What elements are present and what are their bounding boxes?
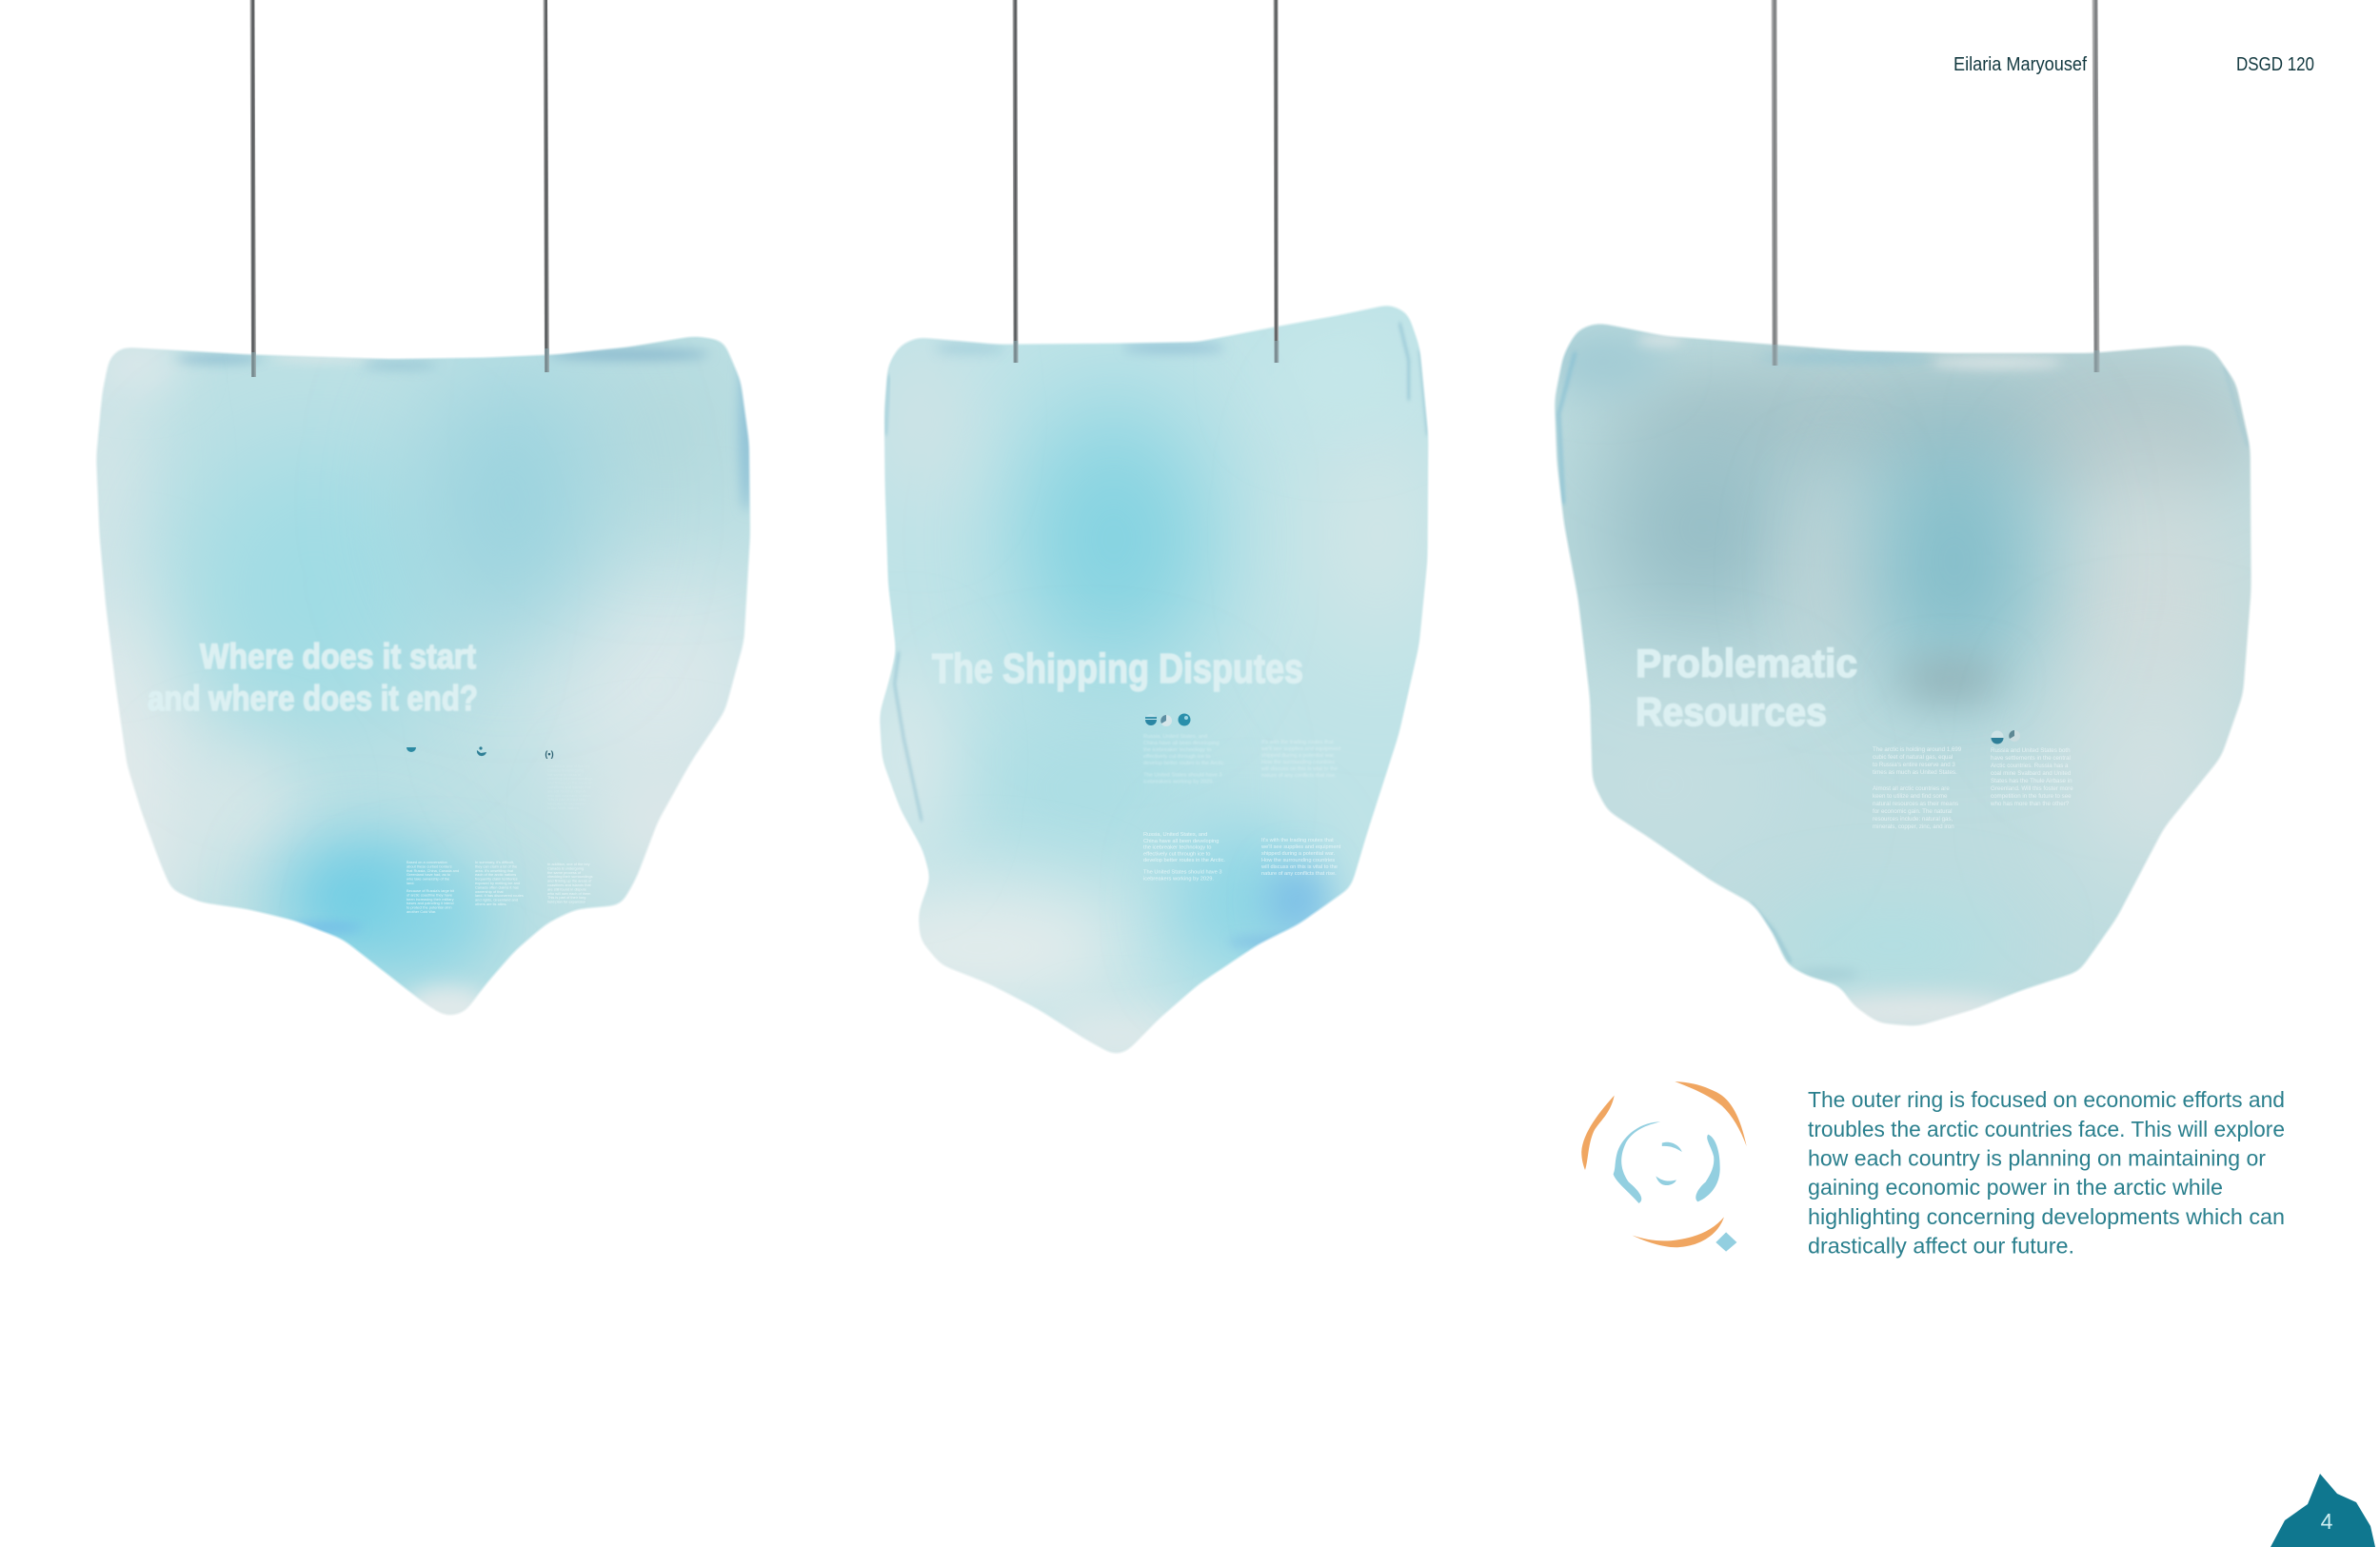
title: where does it start: Where does it start — [200, 637, 476, 676]
panel: ice sheet 1 — [95, 335, 751, 1016]
text columns: sheet 3 — [1873, 746, 2073, 830]
text block: outer ring explanation: how each country is planning on maintaining or — [1808, 1146, 2266, 1171]
faint text: sheet 1 echo: coastlines and islands that — [547, 784, 592, 789]
icons: sheet 2 — [1145, 714, 1190, 726]
faint text: sheet 1 echo: Canada is undergoing — [547, 767, 584, 772]
faint text: sheet 2 echo: The United States should have 3 — [1143, 773, 1222, 779]
text columns: sheet 3: have settlements in the central — [1991, 755, 2071, 762]
title: the shipping disputes: The Shipping Disputes — [932, 645, 1303, 692]
faint text: sheet 2 echo: Russia, United States, and — [1143, 734, 1207, 740]
faint text: sheet 1 echo: are still found in dispute — [547, 788, 586, 793]
text columns: sheet 3: for economic gain. The natural — [1873, 808, 1952, 815]
text block: outer ring explanation: highlighting concerning developments which can — [1808, 1204, 2285, 1229]
text columns: sheet 3: The arctic is holding around 1,699 — [1873, 746, 1962, 753]
text block: outer ring explanation — [1808, 1087, 2285, 1259]
text columns: sheet 1: land. — [407, 881, 414, 885]
panel: ice sheet 2 — [880, 305, 1429, 1054]
text columns: sheet 3: to Russia's entire reserve and 3 — [1873, 762, 1955, 768]
text columns: sheet 1: checking their surroundings — [547, 874, 593, 879]
text columns: sheet 1: and rights, Greenland and — [475, 898, 518, 902]
text block: outer ring explanation: troubles the arctic countries face. This will explore — [1808, 1117, 2285, 1141]
faint text: sheet 2 echo: will discuss on this is vital to the — [1260, 766, 1338, 772]
text columns: sheet 1: that Russia, China, Canada and — [407, 868, 459, 873]
text columns: sheet 1: they can claim a lot of the — [475, 863, 517, 868]
text columns: sheet 1: another Cold War. — [407, 909, 436, 914]
header: course code: DSGD 120 — [2236, 54, 2314, 75]
text columns: sheet 1: coastlines and islands that — [547, 883, 592, 887]
faint text: sheet 2 echo — [1143, 734, 1341, 784]
text columns: sheet 1: This is part of their long — [547, 895, 585, 900]
text columns: sheet 3: natural resources as their means — [1873, 801, 1958, 807]
faint text: sheet 1 echo: checking their surroundings — [547, 776, 593, 781]
text columns: sheet 3: States has the Thule Airbase in — [1991, 778, 2073, 784]
panel: ice sheet 3 — [1554, 323, 2252, 1026]
text columns: sheet 2: It's with the trading routes that — [1261, 838, 1334, 843]
text columns: sheet 2: How the surrounding countries — [1261, 858, 1335, 863]
page number badge — [2271, 1474, 2375, 1547]
rods: hanging wires — [249, 0, 2100, 377]
text columns: sheet 1: who take ownership of the — [407, 877, 449, 882]
text columns: sheet 3: cubic feet of natural gas, equal — [1873, 754, 1953, 761]
text columns: sheet 1: land. It has discovered routes — [475, 893, 524, 898]
faint text: sheet 1 echo: held plan for expansion — [547, 802, 585, 806]
text columns: sheet 3: Almost all arctic countries are — [1873, 785, 1950, 792]
faint text: sheet 2 echo: It's with the trading routes that — [1261, 740, 1334, 745]
text columns: sheet 1: the same process of — [547, 870, 582, 875]
text columns: sheet 1: area. It's unsettling that — [475, 868, 514, 873]
faint text: sheet 2 echo: we'll see supplies and equipment — [1260, 746, 1341, 752]
faint text: sheet 1 echo: In addition, one of the key — [547, 764, 590, 768]
text columns: sheet 2 — [1143, 832, 1341, 882]
text columns: sheet 1: bases and patrolling it intend — [407, 901, 454, 905]
text columns: sheet 1: are still found in dispute — [547, 886, 586, 891]
title: where does it start: and where does it end? — [148, 679, 478, 718]
text block: outer ring explanation: gaining economic power in the arctic while — [1808, 1175, 2223, 1200]
text columns: sheet 1: been increasing their military — [407, 897, 454, 902]
faint text: sheet 1 echo: and firming up the areas of — [547, 781, 592, 785]
title: where does it start — [148, 637, 478, 718]
faint text: sheet 1 echo — [547, 764, 593, 810]
text block: outer ring explanation: drastically affect our future. — [1808, 1234, 2074, 1259]
faint text: sheet 2 echo: the icebreaker technology to — [1143, 747, 1211, 753]
text columns: sheet 1: In addition, one of the key — [547, 862, 590, 866]
faint text: sheet 1 echo: in the Arctic waters — [547, 805, 579, 810]
text columns: sheet 3: Arctic countries. Russia has a — [1991, 763, 2069, 769]
text columns: sheet 3: Greenland. Will this foster more — [1991, 785, 2073, 792]
text columns: sheet 1 — [407, 860, 593, 914]
text columns: sheet 2: icebreakers working by 2029. — [1143, 876, 1214, 882]
title: problematic resources: Resources — [1636, 689, 1827, 734]
faint text: sheet 2 echo: China have all been developing — [1143, 741, 1219, 746]
text columns: sheet 2: will discuss on this is vital to the — [1260, 864, 1338, 870]
faint text: sheet 2 echo: icebreakers working by 2029. — [1143, 779, 1214, 784]
text columns: sheet 3: keen to utilize and find some — [1873, 793, 1948, 800]
text columns: sheet 1: of arctic coastline they have — [407, 892, 452, 897]
text columns: sheet 2: China have all been developing — [1143, 839, 1219, 844]
text columns: sheet 1: about these curbed borders — [407, 863, 452, 868]
text columns: sheet 1: exposed by melting ice and — [475, 881, 520, 885]
faint text: sheet 2 echo: How the surrounding countries — [1261, 760, 1335, 765]
faint text: sheet 1 echo: who will own each of them — [547, 793, 590, 798]
icons: sheet 1 — [407, 746, 554, 759]
text columns: sheet 3: Russia and United States both — [1991, 747, 2071, 754]
page number badge: 4 — [2321, 1509, 2333, 1534]
text columns: sheet 1: and firming up the areas of — [547, 879, 592, 883]
text columns: sheet 1: who will own each of them — [547, 891, 590, 896]
faint text: sheet 2 echo: develop better routes in the Arctic. — [1143, 761, 1225, 766]
title: problematic resources: Problematic — [1636, 641, 1857, 685]
title: problematic resources — [1636, 641, 1857, 734]
faint text: sheet 2 echo: effectively cut through ice to — [1143, 754, 1210, 760]
text columns: sheet 2: effectively cut through ice to — [1143, 851, 1210, 857]
text columns: sheet 3: coal mine Svalbard and United — [1991, 770, 2072, 777]
text columns: sheet 1: held plan for expansion — [547, 900, 585, 904]
text columns: sheet 2: the icebreaker technology to — [1143, 845, 1211, 851]
text columns: sheet 1: In summary, it's difficult, — [475, 860, 514, 864]
text columns: sheet 1: others are its allies. — [475, 902, 507, 906]
faint text: sheet 2 echo: nature of any conflicts that rise. — [1261, 773, 1337, 779]
faint text: sheet 2 echo: shipped during a potential war. — [1261, 753, 1336, 759]
text columns: sheet 1: to protect the potential oil in — [407, 905, 452, 910]
text columns: sheet 1: each of the arctic nations — [475, 872, 516, 877]
text columns: sheet 3: competition in the future to see — [1991, 793, 2072, 800]
text columns: sheet 1: Because of Russia's large bit — [407, 888, 455, 893]
faint text: sheet 1 echo: This is part of their long — [547, 797, 585, 802]
text columns: sheet 1: ownership of that — [475, 889, 505, 894]
text columns: sheet 2: The United States should have 3 — [1143, 870, 1222, 876]
faint text: sheet 1 echo: the same process of — [547, 772, 582, 777]
text columns: sheet 2: shipped during a potential war. — [1261, 851, 1336, 857]
text columns: sheet 1: frequently claim territories — [475, 877, 518, 882]
icon: ring diagram — [1581, 1081, 1747, 1252]
text columns: sheet 1: Canada often claims it has — [475, 884, 519, 889]
text columns: sheet 1: Canada is undergoing — [547, 865, 584, 870]
text block: outer ring explanation: The outer ring is focused on economic efforts and — [1808, 1087, 2285, 1112]
text columns: sheet 1: Greenland have had, as to — [407, 872, 450, 877]
text columns: sheet 2: nature of any conflicts that rise. — [1261, 871, 1337, 877]
text columns: sheet 3: who has more than the other? — [1990, 801, 2070, 807]
text columns: sheet 3: minerals, copper, zinc, and iron — [1873, 823, 1954, 830]
icons: sheet 1: (•) — [545, 749, 554, 759]
text columns: sheet 3: resources include: natural gas, — [1873, 816, 1954, 823]
text columns: sheet 1: Based on a conversation — [407, 860, 447, 864]
text columns: sheet 2: we'll see supplies and equipment — [1260, 844, 1341, 850]
text columns: sheet 3: times as much as United States. — [1873, 769, 1957, 776]
header: author name: Eilaria Maryousef — [1954, 54, 2087, 75]
text columns: sheet 2: develop better routes in the Arctic. — [1143, 858, 1225, 863]
text columns: sheet 2: Russia, United States, and — [1143, 832, 1207, 838]
icons: sheet 3 — [1992, 730, 2020, 744]
